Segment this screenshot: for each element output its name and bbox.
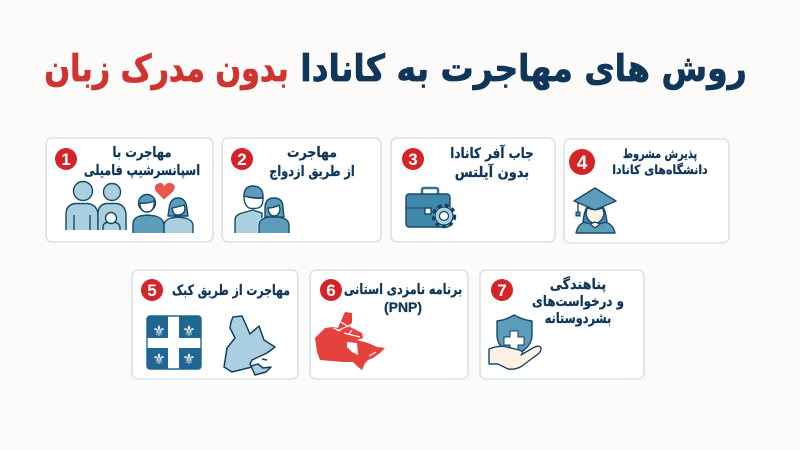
badge 4 [569,149,595,175]
heading 4: پذیرش مشروط [623,147,697,161]
heading 3 [450,144,534,181]
heading 6 [344,282,462,315]
badge 3: 3 [408,150,418,169]
icon: Canada map [315,312,385,370]
heading 7: و درخواست‌های [532,294,624,310]
panel: job offer [391,138,555,242]
heading 2: مهاجرت [287,145,337,161]
heading 1: مهاجرت با [112,145,172,161]
panel: Quebec [132,270,298,379]
heading 2 [269,145,355,180]
title [44,47,747,91]
badge 6 [320,279,342,301]
icon: couple [235,186,289,233]
heading 6: برنامه نامزدی استانی [344,282,462,298]
heading 7 [532,275,624,327]
badge 5: 5 [147,281,157,300]
heading 4: دانشگاه‌های کانادا [612,162,708,177]
title: روش های مهاجرت به کانادا [300,47,747,90]
title: بدون مدرک زبان [44,47,289,91]
heading 7: بشردوستانه [545,311,611,327]
heading 3: بدون آیلتس [455,163,529,181]
icon: Quebec flag: ⚜ [182,322,196,340]
heading 1 [84,145,200,179]
icon: Quebec flag [147,316,201,369]
icon: Quebec map [224,316,275,375]
heading 7: پناهندگی [550,275,606,293]
badge 2: 2 [237,150,247,169]
icon: hand and shield [489,315,541,369]
badge 7 [491,279,513,301]
badge 3 [402,148,424,170]
badge 2 [231,148,253,170]
badge 4: 4 [577,153,588,174]
heading 4 [612,147,708,177]
badge 1 [55,148,77,170]
heading 5: مهاجرت از طریق کبک [172,282,290,298]
icon: family [66,182,193,233]
panel: PNP [310,270,468,379]
heading 6: (PNP) [384,299,422,315]
panel: asylum [480,270,644,379]
icon: graduate [574,188,616,233]
heading 1: اسپانسرشیپ فامیلی [84,163,200,179]
badge 7: 7 [497,281,507,300]
badge 1: 1 [61,150,71,169]
icon: Quebec flag: ⚜ [152,322,166,340]
panel: family sponsorship [46,138,213,242]
heading 2: از طریق ازدواج [269,164,355,180]
icon: briefcase [406,188,454,227]
panel: marriage [222,138,381,242]
heading 3: جاب آفر کانادا [450,144,534,162]
icon: Quebec flag: ⚜ [152,350,166,368]
icon: Quebec flag: ⚜ [182,350,196,368]
badge 5 [141,279,163,301]
badge 6: 6 [326,281,336,300]
panel: university admission [564,139,729,243]
